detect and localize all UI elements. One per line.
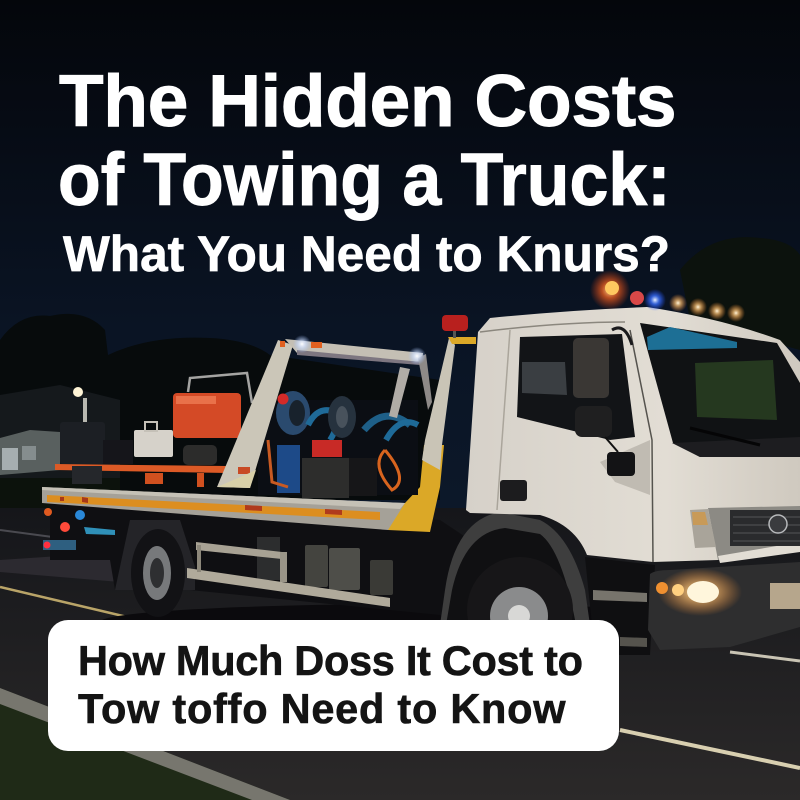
cab windows	[517, 323, 800, 457]
road	[0, 508, 800, 800]
subtitle: What You Need to Knurs?	[63, 226, 670, 282]
callout	[48, 620, 619, 751]
callout text: How Much Doss It Cost to	[78, 637, 583, 684]
tow ramp frame	[217, 337, 476, 488]
equipment load	[60, 373, 418, 498]
side rail and tanks	[187, 542, 393, 607]
flatbed deck	[42, 445, 444, 532]
equipment shelf	[55, 464, 227, 487]
title	[58, 61, 676, 221]
night sky	[0, 0, 800, 600]
front bumper and headlight	[593, 562, 800, 650]
callout text	[78, 637, 583, 732]
truck shadow	[100, 604, 740, 640]
beacons on ramp	[293, 315, 468, 365]
front wheel and arch	[440, 512, 590, 663]
background trees	[0, 237, 800, 500]
title: The Hidden Costs	[59, 61, 676, 142]
roof beacon light bar	[590, 270, 745, 322]
title: of Towing a Truck:	[58, 138, 671, 221]
rear wheel	[115, 520, 195, 617]
callout text: Tow toffo Need to Know	[78, 685, 566, 732]
truck cab	[466, 307, 800, 563]
side mirror	[573, 338, 635, 476]
dark chassis front of wheel	[585, 557, 655, 655]
chassis underside	[43, 500, 470, 640]
house	[0, 385, 120, 508]
road lines and curb	[0, 530, 800, 800]
